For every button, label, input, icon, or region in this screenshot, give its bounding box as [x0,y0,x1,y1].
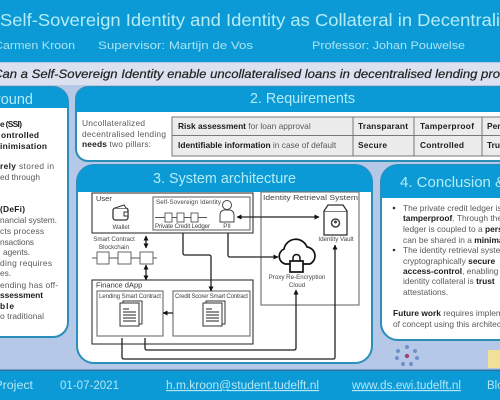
user box: User [96,194,112,203]
icon: document [120,301,142,326]
smart contract blockchain [92,236,157,264]
panel: system architecture [77,165,372,363]
text block: ding requires [0,258,52,268]
text block: rely stored in [0,161,54,171]
requirements table: Secure [358,140,387,150]
conclusion text: access-control, enabling [403,266,499,276]
text block: ssessment [0,290,43,300]
text block: o traditional [0,311,44,321]
conclusion text: The private credit ledger is [403,203,500,213]
private credit ledger chain: Private Credit Ledger [155,223,210,230]
icon: proxy re-encryption cloud: Cloud [289,282,306,289]
panel: conclusion [381,165,500,340]
identity retrieval system box: Identity Retrieval System [263,193,358,202]
text block: cts process [0,226,44,236]
footer: h.m.kroon@student.tudelft.nl [166,380,319,392]
conclusion text: cryptographically secure [403,256,496,266]
text block: inimisation [0,141,47,151]
icon: research lab logo [395,345,419,366]
requirements table: Controlled [420,140,464,150]
user box [92,193,253,233]
lending smart contract: Lending Smart Contract [99,293,161,300]
self-sovereign identity box: Self-Sovereign Identity [156,199,222,206]
requirements table: Risk assessment for loan approval [178,121,311,131]
credit scorer smart contract: Credit Scorer Smart Contract [175,293,248,300]
title: Self-Sovereign Identity and Identity as Collateral in Decentrali [0,10,500,30]
heading: 3. System architecture [153,171,296,187]
text block: ble [0,301,14,311]
conclusion text [393,203,500,329]
icon: university logo [488,350,500,368]
identity retrieval system box [261,192,359,305]
conclusion text: attestations. [403,287,448,297]
panel: background [0,87,68,337]
panel: requirements [76,87,500,161]
text block: es. [0,268,11,278]
requirements table: Identifiable information in case of default [178,140,337,150]
research question bar: Can a Self-Sovereign Identity enable uncollateralised loans in decentralised lending pro [0,68,500,81]
intro text: needs two pillars: [82,139,151,149]
research question bar [0,63,500,85]
icon: document [203,301,225,326]
icon: wallet [113,205,130,231]
footer: www.ds.ewi.tudelft.nl [351,380,461,392]
footer: 01-07-2021 [60,380,119,392]
conclusion text: identity collateral is trust [403,276,495,286]
intro text: decentralised lending [82,129,166,139]
lending smart contract [97,291,163,336]
icon: proxy re-encryption cloud: Proxy Re-Encryption [269,274,326,281]
text block: (DeFi) [0,204,25,214]
authors: Professor: Johan Pouwelse [312,40,465,52]
icon: wallet: Wallet [113,224,130,231]
requirements table: Tamperproof [420,121,474,131]
self-sovereign identity box [153,197,250,230]
text block: nsactions [0,237,34,247]
text block: e (SSI) [0,119,22,129]
footer [0,370,500,400]
smart contract blockchain: Smart Contract [93,236,135,243]
text block: ed through [0,172,40,182]
authors: Supervisor: Martijn de Vos [98,40,254,52]
text block: ending has off- [0,280,58,290]
finance dapp box [92,280,253,344]
smart contract blockchain: Blockchain [99,244,130,251]
authors [0,40,465,52]
text block: agents. [3,247,30,257]
intro text [82,118,166,149]
intro text: Uncollateralized [82,118,145,128]
conclusion text: tamperproof. Through the [403,213,500,223]
requirements table: Transparant [358,121,408,131]
arrows [122,217,335,359]
heading: 2. Requirements [250,91,355,107]
text block: ontrolled [1,130,39,140]
text block [0,119,58,321]
icon: identity vault: Identity Vault [318,236,354,243]
icon: person PII: PII [223,223,231,230]
icon: proxy re-encryption cloud [269,239,326,289]
text block: nancial system. [0,215,57,225]
requirements table [172,117,500,156]
top banner [0,0,500,62]
finance dapp box: Finance dApp [96,280,142,290]
credit scorer smart contract [173,291,250,336]
